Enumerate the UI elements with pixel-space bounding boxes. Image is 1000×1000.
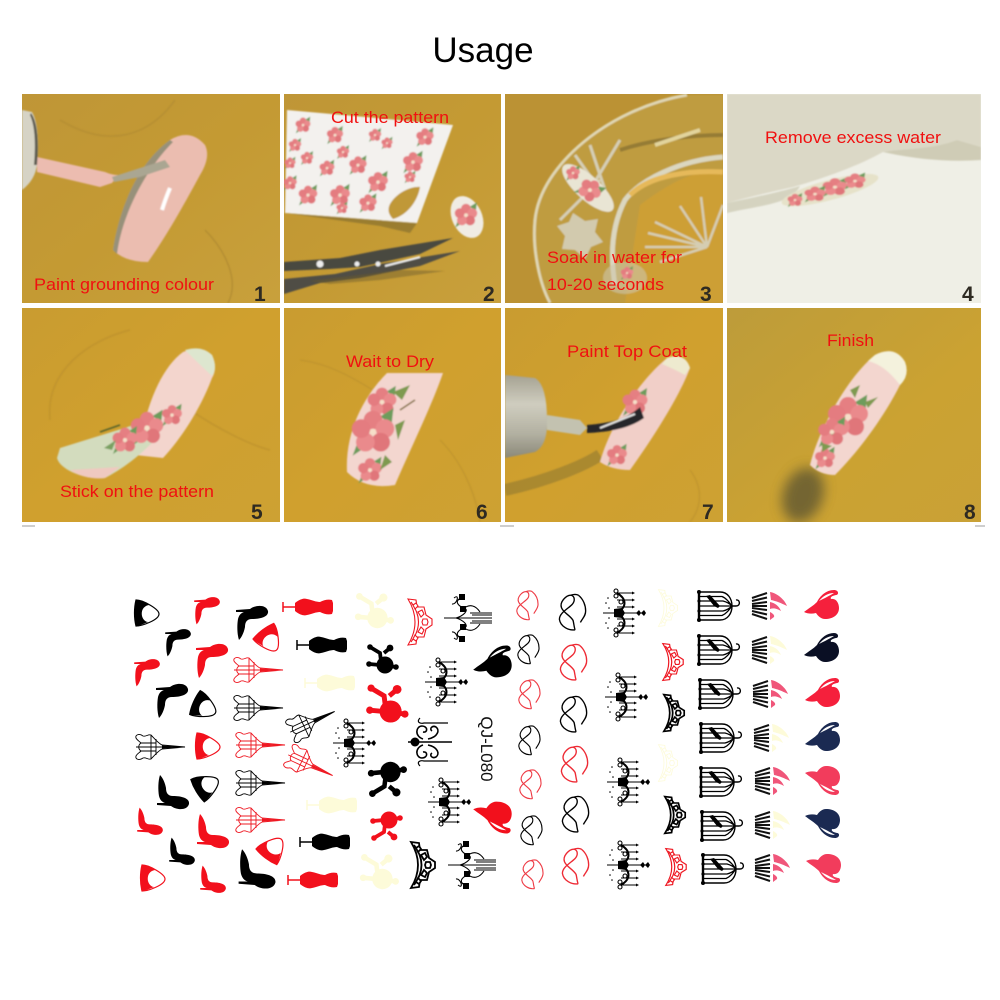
- sticker: heel black: [239, 849, 275, 889]
- cut-out piece: [450, 195, 484, 239]
- sticker: heel red: [200, 866, 226, 893]
- sticker: bag red: [140, 865, 165, 891]
- sticker: heel black: [236, 606, 268, 640]
- panel: step 7 paint top coat: 7: [702, 501, 714, 524]
- tissue: [56, 425, 152, 478]
- sticker: heel red: [137, 808, 163, 835]
- decal: [782, 174, 878, 206]
- sticker: eiffel red: [236, 808, 285, 832]
- finished nail: [810, 351, 907, 475]
- panel: step 1 paint grounding colour: Paint grounding colour: [34, 275, 214, 294]
- sticker: crown black: [411, 842, 435, 888]
- panel: step 5 stick on the pattern: [22, 308, 280, 524]
- panel: step 2 cut the pattern: [283, 94, 501, 306]
- sticker: heel red: [197, 814, 229, 848]
- sticker: eiffel red angled: [283, 743, 338, 787]
- sticker: mannequin red: [283, 599, 333, 615]
- panel: step 8 finish: [727, 308, 981, 528]
- sticker: heel red: [196, 644, 228, 678]
- panel: step 3 soak in water: 3: [700, 283, 712, 306]
- sticker: mannequin red: [288, 872, 338, 888]
- panel: step 4 remove excess water: 4: [962, 283, 974, 306]
- sticker: bag black: [188, 690, 221, 724]
- panel: step 1 paint grounding colour: [22, 94, 280, 306]
- nail: [135, 349, 215, 458]
- sticker: heel black: [156, 684, 188, 718]
- scissors: [284, 238, 453, 271]
- sticker: chandelier: [448, 841, 496, 889]
- sticker: eiffel black: [236, 771, 285, 795]
- panel: step 8 finish: Finish: [827, 331, 874, 350]
- panel: step 6 wait to dry: 6: [476, 501, 488, 524]
- sticker column: birdcages: [697, 590, 743, 885]
- sticker: cream poodle: [360, 854, 399, 889]
- sticker: cream mannequin: [307, 797, 357, 813]
- sticker: cream mannequin: [305, 675, 355, 691]
- sticker: cream poodle: [355, 593, 394, 628]
- sticker: eiffel red: [234, 658, 283, 682]
- glass bowl: [532, 95, 723, 303]
- flower decal: [131, 410, 163, 446]
- sticker: eiffel black angled: [285, 700, 340, 744]
- sticker: mannequin black: [297, 637, 347, 653]
- sticker: mannequin black: [300, 834, 350, 850]
- sticker: bag red: [252, 622, 288, 657]
- panel: step 3 soak in water: Soak in water for: [547, 248, 682, 267]
- panel: step 6 wait to dry: [284, 308, 501, 524]
- sticker: heel red: [134, 659, 160, 686]
- panel: step 8 finish: 8: [964, 501, 976, 524]
- sticker column: large hearts: [559, 594, 589, 884]
- sticker: bag red: [255, 831, 291, 866]
- sticker column: crowns: [658, 590, 686, 885]
- sticker: crown red: [408, 599, 432, 645]
- sticker: poodle black: [368, 762, 407, 797]
- sticker: heel black: [169, 838, 195, 865]
- shadow: [775, 462, 831, 528]
- sticker column: swans: [804, 590, 841, 883]
- sticker: poodle black: [366, 644, 399, 674]
- nail with flowers: [347, 373, 443, 486]
- decal in water: [561, 163, 615, 213]
- sticker sheet: [134, 589, 841, 893]
- sticker: swan black: [473, 646, 512, 677]
- sticker: bag black: [190, 768, 224, 803]
- sheet code: QJ-L080: [477, 716, 496, 782]
- sticker: chandelier: [428, 778, 471, 826]
- sticker: heel black: [157, 775, 189, 809]
- sticker: chandelier: [444, 594, 492, 642]
- sticker: eiffel black: [234, 696, 283, 720]
- panel: step 4 remove excess water: Remove excess water: [765, 128, 941, 147]
- nail: [113, 135, 207, 262]
- sticker: chandelier: [333, 719, 376, 767]
- panel: step 7 paint top coat: [505, 308, 723, 524]
- sticker: swan red: [473, 802, 512, 834]
- nail: [600, 356, 690, 470]
- panel: step 4 remove excess water: [727, 94, 981, 306]
- pattern sheet: [285, 110, 453, 223]
- sticker: bag black: [134, 600, 159, 626]
- title: Usage: [432, 31, 534, 70]
- sticker: scroll chandelier: [408, 718, 452, 766]
- panel: step 7 paint top coat: Paint Top Coat: [567, 342, 687, 361]
- sticker: poodle red: [370, 812, 403, 841]
- brush: [505, 375, 547, 458]
- panel: step 3 soak in water: [505, 94, 723, 306]
- panel: step 2 cut the pattern: Cut the pattern: [331, 108, 449, 127]
- sticker column: small hearts: [517, 591, 543, 889]
- panel: step 1 paint grounding colour: 1: [254, 283, 266, 306]
- sticker: chandelier: [425, 658, 468, 706]
- sticker: poodle red: [366, 684, 409, 723]
- sticker: heel red: [194, 597, 220, 624]
- sticker column: cupcakes: [752, 592, 790, 882]
- panel: step 6 wait to dry: Wait to Dry: [346, 352, 435, 371]
- brush: [37, 157, 118, 187]
- sticker: eiffel black: [136, 735, 185, 759]
- paper towel: [727, 94, 981, 203]
- panel: step 2 cut the pattern: 2: [483, 283, 495, 306]
- panel: step 5 stick on the pattern: 5: [251, 501, 263, 524]
- sticker: eiffel red: [236, 733, 285, 757]
- sticker column: chandeliers: [603, 589, 650, 889]
- panel: step 3 soak in water: 10-20 seconds: [547, 275, 664, 294]
- sticker: bag red: [196, 733, 220, 759]
- panel: step 5 stick on the pattern: Stick on the pattern: [60, 482, 214, 501]
- sticker: heel black: [165, 629, 191, 656]
